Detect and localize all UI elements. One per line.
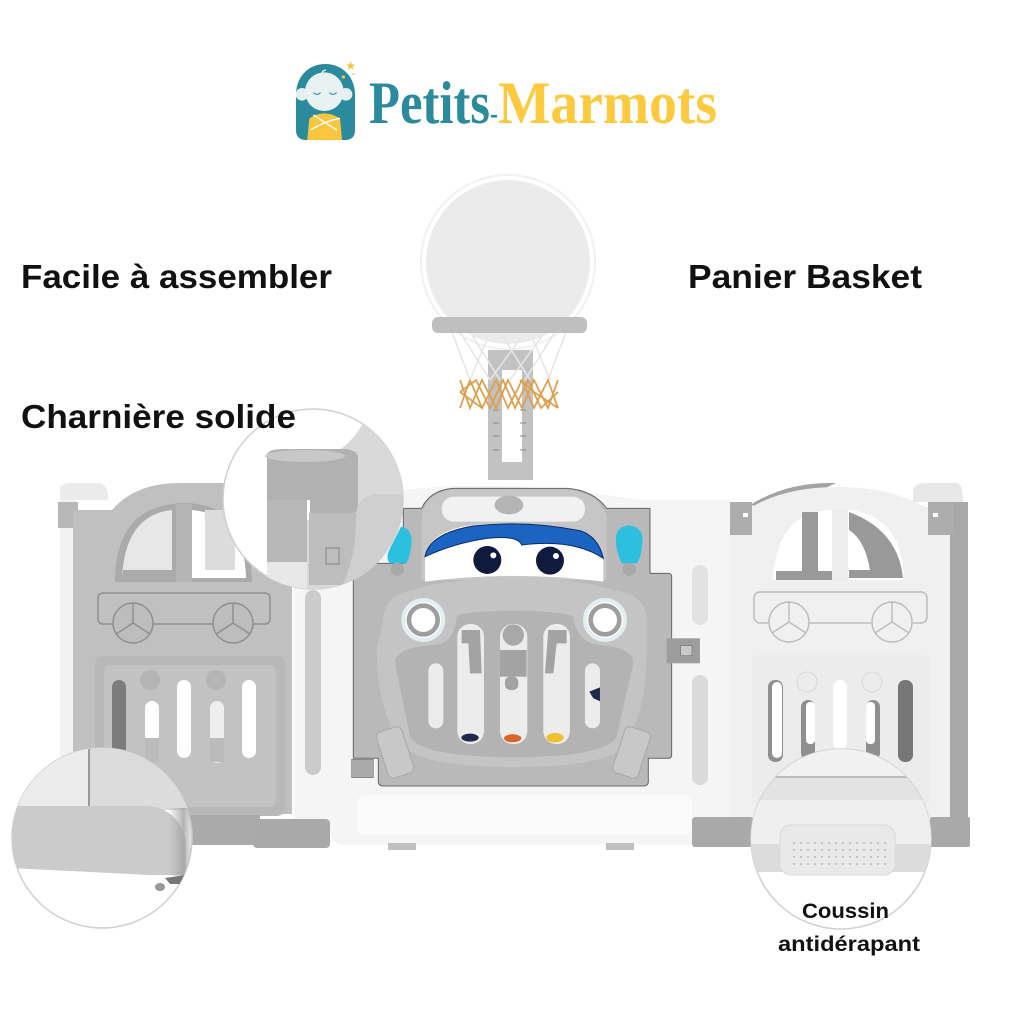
logo text: Petits	[369, 70, 490, 136]
logo: -	[490, 97, 498, 130]
wheels	[375, 725, 652, 780]
basketball hoop	[421, 175, 595, 480]
blue lights	[387, 527, 412, 563]
grille slots	[428, 624, 600, 744]
label: Panier Basket: Panier Basket	[688, 258, 922, 295]
label: Facile à assembler: Facile à assembler	[21, 258, 332, 295]
rim	[432, 317, 587, 333]
net	[452, 332, 566, 408]
label: Coussin: Coussin	[802, 900, 889, 923]
arch shadow behind	[750, 483, 836, 510]
base feet	[692, 817, 970, 847]
left foot	[253, 819, 330, 848]
centre panel	[253, 486, 730, 850]
logo: Marmots	[498, 70, 717, 136]
corner post	[58, 483, 108, 800]
roof handle	[442, 497, 585, 522]
car band	[754, 592, 927, 642]
eyes	[425, 523, 603, 582]
hinge tab	[352, 759, 373, 778]
window	[115, 503, 252, 582]
left playpen panel	[58, 483, 292, 845]
latch	[667, 638, 700, 663]
bumper grille	[377, 578, 647, 767]
label: Charnière solide: Charnière solide	[21, 398, 296, 435]
toys behind grille	[461, 624, 600, 742]
vent block	[95, 656, 285, 816]
door body	[353, 488, 672, 786]
white frame	[294, 486, 730, 850]
grey panel body	[73, 483, 292, 814]
pole	[488, 350, 533, 480]
window	[773, 510, 904, 582]
car band	[98, 593, 270, 643]
backboard	[421, 175, 595, 349]
vent block	[752, 655, 930, 805]
headlights	[403, 600, 625, 640]
zoom circle: anti-slip pad	[750, 748, 932, 929]
car door	[352, 488, 700, 786]
zoom circle: hinge	[223, 409, 410, 592]
roof arch	[422, 489, 607, 580]
logo	[296, 61, 717, 140]
label: antidérapant: antidérapant	[778, 933, 920, 956]
right playpen panel	[692, 483, 970, 847]
zoom circle: corner foot	[10, 748, 195, 928]
icon: sleeping baby	[296, 61, 355, 140]
hinges	[710, 502, 953, 535]
corner post	[913, 483, 968, 818]
white panel body	[730, 487, 950, 817]
